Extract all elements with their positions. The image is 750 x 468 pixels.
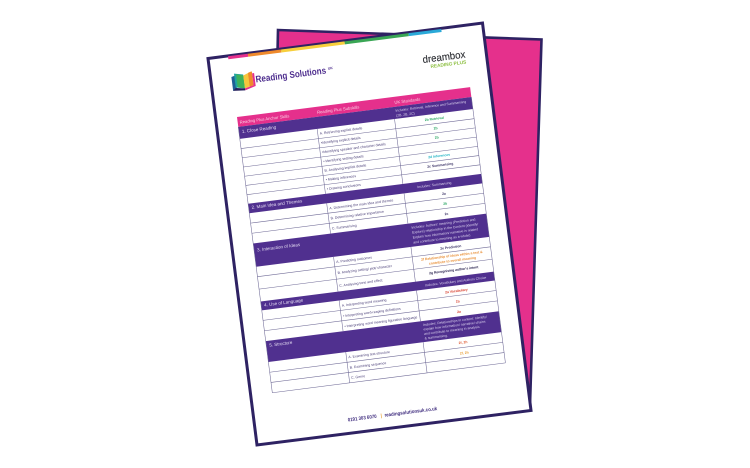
section 5: structure: C. Genre bbox=[351, 374, 365, 380]
table header row: Reading Plus Anchor Skills bbox=[239, 113, 290, 125]
section 1: close reading: 2b Retrieval bbox=[425, 116, 444, 122]
section 1: close reading: 2b bbox=[433, 126, 438, 131]
section 3: interaction of ideas: Explain how information/ narrative is related bbox=[413, 227, 478, 240]
section 5: structure: 2f, 2h bbox=[460, 350, 469, 356]
section 2: main idea and themes: B. Determining relative importance bbox=[330, 210, 384, 220]
section 5: structure: A. Examining text structure bbox=[348, 350, 390, 359]
section 2: main idea and themes: 2. Main Idea and Themes bbox=[251, 198, 303, 210]
section 4: use of language: A. Interpreting word meaning bbox=[342, 298, 387, 308]
footer contact line: 0191 303 6070 bbox=[347, 414, 377, 423]
section 1: close reading: • Making inferences bbox=[325, 174, 357, 182]
section 3: interaction of ideas: and contribute to meaning as a whole) bbox=[413, 233, 471, 245]
section 3: interaction of ideas: Explore) relationship in the Content (identify/ bbox=[412, 222, 479, 235]
section 1: close reading: A. Retrieving explicit details bbox=[320, 126, 363, 136]
section 1: close reading: 2b bbox=[435, 135, 439, 140]
table header row bbox=[237, 87, 471, 127]
section 5: structure bbox=[269, 315, 493, 390]
section 3: interaction of ideas: 3. Interaction of Ideas bbox=[257, 242, 301, 253]
front document page bbox=[208, 23, 531, 445]
section 1: close reading: Includes: Retrieval, Inference and Summarising bbox=[395, 100, 467, 113]
section 1: close reading: • Drawing conclusions bbox=[327, 183, 361, 191]
section bands bbox=[238, 97, 501, 362]
section 3: interaction of ideas: A. Predicting outcomes bbox=[336, 255, 372, 264]
section 1: close reading: B. Analysing implicit details bbox=[324, 163, 367, 173]
section 5: structure: B. Examining sequence bbox=[350, 361, 387, 370]
icon: open book logo bbox=[231, 71, 256, 92]
section 3: interaction of ideas bbox=[256, 217, 485, 298]
section 4: use of language: 4. Use of Language bbox=[264, 298, 304, 308]
footer contact line: readingsolutionsuk.co.uk bbox=[384, 406, 438, 419]
standards table bbox=[237, 87, 505, 393]
table header row: UK Standards bbox=[394, 97, 421, 105]
section 3: interaction of ideas: B. Analyzing setting/ plot/ character bbox=[337, 264, 393, 275]
section 3: interaction of ideas: 2e Prediction bbox=[440, 244, 462, 251]
section 4: use of language: 2a Vocabulary bbox=[445, 288, 468, 294]
section 1: close reading: •Identifying speaker and character details bbox=[322, 142, 386, 154]
section 2: main idea and themes: A. Determining the main idea and themes bbox=[329, 198, 394, 210]
logo text: Reading Solutions: UK bbox=[328, 66, 334, 71]
section 3: interaction of ideas: 2g Recognising author's intent bbox=[429, 265, 479, 275]
footer contact line bbox=[347, 406, 438, 423]
table header row: Reading Plus Subskills bbox=[317, 104, 360, 115]
section 1: close reading: 2c Summarising bbox=[427, 162, 454, 169]
rainbow colour bar bbox=[228, 29, 442, 59]
footer contact line: | bbox=[380, 413, 383, 419]
section 2: main idea and themes: 2b bbox=[443, 202, 447, 206]
section 3: interaction of ideas: 2f Relationship of ideas within a text & bbox=[421, 250, 483, 262]
section 1: close reading bbox=[242, 100, 475, 201]
section 4: use of language: • Interpreting word meaning figurative language bbox=[344, 315, 418, 329]
table grid lines bbox=[238, 97, 505, 393]
section 4: use of language: Includes: Vocabulary and Authors Choice bbox=[425, 276, 487, 287]
section 2: main idea and themes: Includes: Summarising bbox=[417, 181, 452, 189]
logo: dreambox Reading Plus: dreambox bbox=[422, 50, 466, 66]
section 5: structure: & summarising. bbox=[424, 333, 448, 340]
section 1: close reading: (2B, 2B, 2C) bbox=[396, 111, 415, 118]
section 5: structure: Includes: Relationships in content: Identify/ bbox=[423, 315, 487, 327]
section 4: use of language: 2a bbox=[456, 299, 460, 304]
section 5: structure: 2f, 2h bbox=[458, 340, 468, 345]
section 2: main idea and themes: 2a bbox=[442, 192, 446, 196]
section 3: interaction of ideas: contribute to overall meaning bbox=[429, 256, 476, 266]
section 1: close reading: • Identifying setting details bbox=[323, 154, 364, 163]
section 4: use of language: • Interpreting word-reaping definitions bbox=[343, 307, 401, 318]
section 2: main idea and themes bbox=[251, 179, 456, 240]
section 1: close reading: 2d Inferences bbox=[428, 153, 450, 159]
section 4: use of language bbox=[264, 274, 490, 338]
logo: dreambox Reading Plus: READING PLUS bbox=[430, 59, 467, 70]
section 5: structure: 5. Structure bbox=[269, 340, 293, 348]
section 3: interaction of ideas: Includes: Authors' meaning (Prediction and bbox=[411, 218, 476, 230]
section 5: structure: explain how information/ narrative/ chains bbox=[423, 320, 486, 332]
section 5: structure: and contribute to meaning in analysis bbox=[424, 325, 480, 336]
back pink sheet bbox=[270, 30, 542, 405]
section 3: interaction of ideas: C. Analysing tone and effect bbox=[339, 278, 383, 288]
section 1: close reading: •Identifying explicit details bbox=[321, 136, 361, 145]
section 2: main idea and themes: 2c bbox=[444, 212, 449, 216]
logo text: Reading Solutions: Reading Solutions bbox=[255, 66, 327, 85]
section 4: use of language: 2a bbox=[457, 310, 461, 314]
section 1: close reading: 1. Close Reading bbox=[242, 125, 277, 134]
section 2: main idea and themes: C. Summarising bbox=[332, 223, 357, 231]
